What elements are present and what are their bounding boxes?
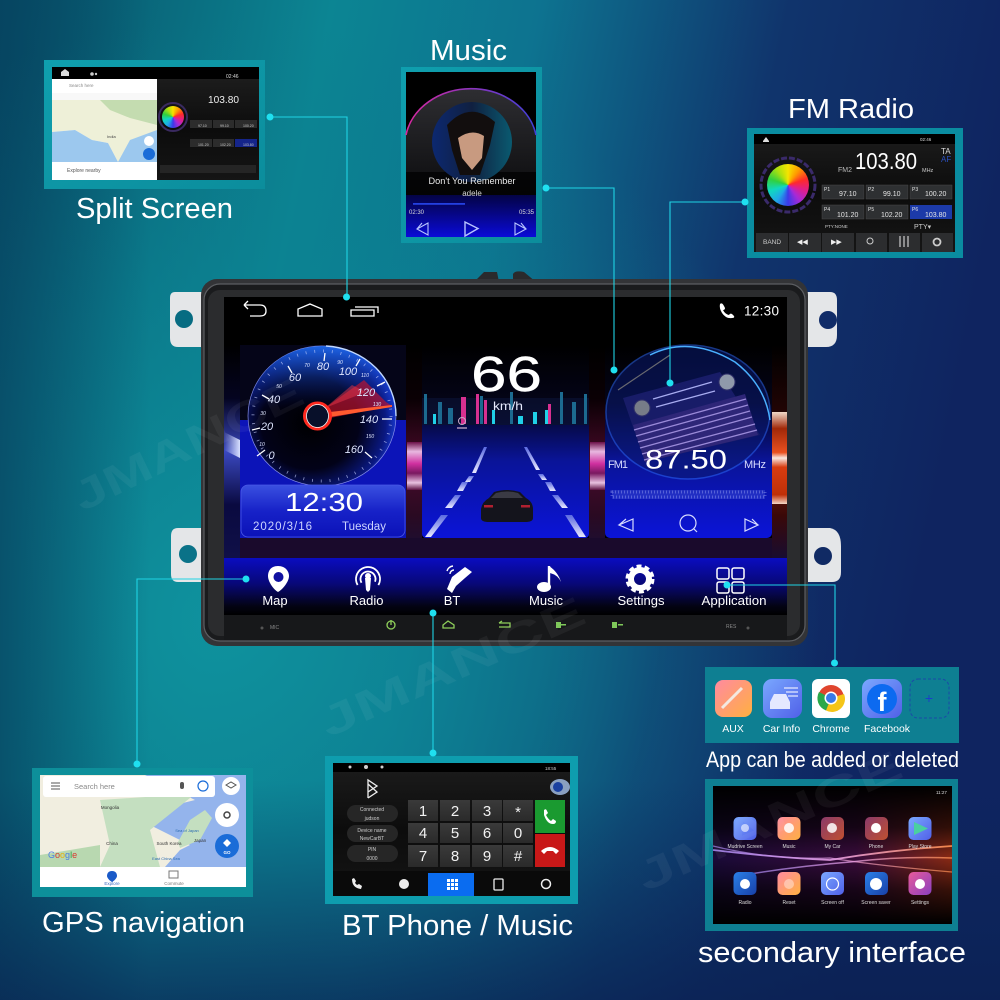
skyline <box>422 392 589 425</box>
panel: apps: + <box>925 690 933 706</box>
major ticks <box>252 353 392 458</box>
panel: GPS navigation: Mongolia <box>101 805 120 810</box>
app labels: Settings <box>911 900 930 906</box>
panel: split screen: 02:46 <box>226 74 239 80</box>
dial numbers: 140 <box>360 414 379 426</box>
connector: application <box>724 582 838 666</box>
hub <box>304 403 330 429</box>
car <box>481 490 533 522</box>
panel: BT phone: 5 <box>451 825 459 842</box>
radio grille <box>633 394 758 462</box>
app labels: Reset <box>782 900 796 906</box>
needle <box>330 405 392 417</box>
watermark: JMANCE <box>313 587 592 746</box>
heading: FM radio: FM Radio <box>788 93 914 124</box>
panel: split screen: Search here <box>69 83 94 88</box>
radio pane <box>157 79 259 180</box>
panel: FM radio: P3 <box>912 187 918 193</box>
radio card <box>605 345 772 538</box>
app labels: Chrome <box>812 723 850 735</box>
app labels <box>727 844 932 906</box>
panel: BT phone: 4 <box>419 825 427 842</box>
panel: GPS navigation: Google <box>48 850 77 860</box>
panel: FM radio: BAND <box>763 239 781 246</box>
speed card: 66 <box>471 348 542 402</box>
panel: music <box>401 67 542 243</box>
app labels <box>722 723 911 735</box>
panel: BT phone: 3 <box>483 803 491 820</box>
panel: FM radio: MHz <box>922 168 934 174</box>
panel: FM radio: P5 <box>868 207 874 213</box>
panel: split screen: 102.20 <box>220 143 231 147</box>
icon: facebook <box>862 679 902 718</box>
icon: settings gear <box>631 570 649 588</box>
heading: music: Music <box>430 35 507 67</box>
head unit <box>170 271 841 646</box>
nav labels: Music <box>529 593 563 608</box>
speed card <box>422 345 589 538</box>
panel: FM radio: 99.10 <box>883 191 901 198</box>
panel: music: adele <box>462 189 482 198</box>
panel: BT phone: 9 <box>483 848 491 865</box>
clock panel <box>241 485 405 537</box>
icon: bluetooth <box>368 780 377 798</box>
panel: music: 02:30 <box>409 210 425 216</box>
panel: apps: f <box>878 687 888 717</box>
icon: applications grid <box>717 568 744 593</box>
icon: car info <box>763 679 802 718</box>
panel: split screen: 99.10 <box>220 124 229 128</box>
panel: FM radio: P2 <box>868 187 874 193</box>
panel: BT phone: * <box>515 804 521 821</box>
dial numbers: 10 <box>259 442 265 448</box>
app labels: Car Info <box>763 723 800 735</box>
app labels: Facebook <box>864 723 911 735</box>
album art <box>432 102 512 182</box>
panel: BT phone: 7 <box>419 848 427 865</box>
connector: BT <box>430 610 436 756</box>
dial numbers: 120 <box>357 387 376 399</box>
panel: split screen: 103.80 <box>208 94 239 106</box>
speedometer card <box>240 345 406 538</box>
heading: split screen: Split Screen <box>76 193 233 225</box>
dial numbers: 110 <box>361 373 369 379</box>
panel: FM radio: TA <box>941 147 951 156</box>
panel: FM radio: 102.20 <box>881 212 903 219</box>
panel: FM radio: 103.80 <box>855 148 917 174</box>
panel: GPS navigation: Search here <box>74 782 115 791</box>
dial numbers: 30 <box>260 411 266 417</box>
system icons top bar <box>244 301 378 316</box>
nav labels: BT <box>444 593 460 608</box>
panel: FM radio: 100.20 <box>925 191 947 198</box>
app labels: AUX <box>722 723 744 735</box>
panel: FM radio: PTY:NONE <box>825 224 848 229</box>
panel: secondary interface: 11:27 <box>936 790 947 795</box>
panel: BT phone: 8 <box>451 848 459 865</box>
panel: split screen: 101.20 <box>198 143 209 147</box>
app labels: Screen off <box>821 900 844 906</box>
dial numbers: 0 <box>268 450 275 462</box>
panel: music: 05:35 <box>519 210 535 216</box>
watermark: JMANCE <box>630 741 909 900</box>
panel: BT phone: PIN <box>368 847 377 853</box>
device pills <box>347 805 398 862</box>
panel: BT phone: 18:55 <box>545 766 557 771</box>
panel: GPS navigation: China <box>106 841 118 846</box>
robot assistant <box>550 779 570 795</box>
panel: split screen: 100.20 <box>243 124 254 128</box>
panel: split screen <box>44 60 265 189</box>
icon: music note <box>548 566 550 586</box>
control strip: MIC <box>270 625 280 631</box>
panel: FM radio: 02:46 <box>920 137 932 142</box>
icon: colour wheel split screen <box>162 106 184 128</box>
dial numbers: 70 <box>304 363 310 369</box>
navigation bar <box>224 558 787 615</box>
panel: GPS navigation: South Korea <box>156 841 182 846</box>
panel: BT phone: 0 <box>514 825 522 842</box>
heading: BT phone: BT Phone / Music <box>342 910 573 942</box>
light streaks <box>224 345 240 558</box>
app labels: My Car <box>824 844 841 850</box>
speedometer card: Tuesday <box>342 521 386 533</box>
signal band <box>612 490 765 499</box>
panel: BT phone: judson <box>364 816 380 822</box>
connector: split screen <box>266 114 350 300</box>
icon: phone status <box>720 303 734 318</box>
control strip <box>224 615 787 640</box>
icon: chrome <box>812 679 850 718</box>
app labels: Phone <box>869 844 883 850</box>
keypad <box>408 800 533 867</box>
panel: FM radio: 103.80 <box>925 212 947 219</box>
app grid <box>734 817 756 840</box>
panel: GPS navigation <box>32 768 253 897</box>
dial numbers: 20 <box>260 421 274 433</box>
caption: apps: App can be added or deleted <box>706 747 959 772</box>
mounting brackets <box>170 292 841 582</box>
panel: GPS navigation: Commute <box>164 881 184 886</box>
connector: FM radio <box>666 198 748 386</box>
top clips <box>474 271 536 282</box>
app labels: Mudrive Screen <box>727 844 763 850</box>
dial numbers: 150 <box>366 434 374 440</box>
panel: split screen: 97.10 <box>198 124 207 128</box>
status clock: 12:30 <box>744 304 779 318</box>
icon: AUX <box>715 680 752 717</box>
panel: FM radio: 101.20 <box>837 212 859 219</box>
panel: FM radio: ▶▶ <box>831 239 842 246</box>
icon: colour wheel FM radio <box>767 164 809 206</box>
dial numbers: 80 <box>317 361 330 373</box>
icon: map pin <box>268 566 289 592</box>
panel: BT phone: 0000 <box>366 856 378 862</box>
panel: FM radio: PTY▾ <box>914 224 932 231</box>
nav labels: Settings <box>618 593 665 608</box>
dial numbers: 50 <box>276 384 282 390</box>
bottom tabs <box>333 871 570 896</box>
connector: music <box>542 184 618 374</box>
panel: BT phone: 6 <box>483 825 491 842</box>
panel: FM radio: P4 <box>824 207 830 213</box>
panel: split screen: Explore nearby <box>67 168 101 174</box>
panel: BT phone: 2 <box>451 803 459 820</box>
dial numbers: 100 <box>339 366 358 378</box>
app labels: Screen saver <box>861 900 891 906</box>
speedometer card: 2020/3/16 <box>253 521 312 533</box>
panel: secondary interface <box>705 779 958 931</box>
connector: GPS <box>134 576 250 768</box>
panel: BT phone: 1 <box>419 803 427 820</box>
panel: GPS navigation: Explore <box>104 881 120 886</box>
nav labels <box>262 593 766 608</box>
panel: GPS navigation: GO <box>223 850 231 855</box>
panel: FM radio: AF <box>941 155 951 164</box>
panel: GPS navigation: Sea of Japan <box>175 828 199 833</box>
dial numbers: 40 <box>268 394 281 406</box>
heading: secondary interface: secondary interface <box>698 937 966 969</box>
dial numbers: 130 <box>373 402 381 408</box>
heading: GPS navigation: GPS navigation <box>42 907 245 939</box>
panel: music: Don't You Remember <box>428 176 516 187</box>
speedometer card: 12:30 <box>285 487 363 517</box>
dial numbers: 60 <box>289 372 302 384</box>
dial numbers: 160 <box>345 444 364 456</box>
icon: radio <box>352 563 384 595</box>
watermark <box>65 368 909 900</box>
panel: BT phone: NewCarBT <box>360 836 384 842</box>
app labels: Play Store <box>908 844 932 850</box>
panel: FM radio: FM2 <box>838 167 852 174</box>
app labels: Music <box>782 844 796 850</box>
panel: GPS navigation: East China Sea <box>152 856 181 861</box>
panel: BT phone: Connected <box>360 807 384 813</box>
radio card: 87.50 <box>645 444 727 474</box>
panel: apps <box>705 667 959 743</box>
nav labels: Application <box>702 593 766 608</box>
panel: FM radio: P6 <box>912 207 918 213</box>
panel: FM radio: 97.10 <box>839 191 857 198</box>
screen <box>224 297 787 615</box>
add slot <box>910 679 949 718</box>
panel: GPS navigation: Japan <box>194 838 207 843</box>
radio card: MHz <box>744 459 766 471</box>
map pane <box>52 79 157 180</box>
icon: BT handset <box>447 567 472 593</box>
speed card: km/h <box>493 399 523 413</box>
panel: BT phone <box>325 756 578 904</box>
bezel <box>201 279 808 646</box>
panel: FM radio: ◀◀ <box>797 239 808 246</box>
panel: BT phone: # <box>514 848 523 865</box>
panel: FM radio: P1 <box>824 187 830 193</box>
nav labels: Radio <box>350 593 383 608</box>
watermark: JMANCE <box>65 368 311 520</box>
control strip: RES <box>726 624 737 630</box>
dial numbers: 90 <box>337 360 343 366</box>
nav labels: Map <box>262 593 288 608</box>
app labels: Radio <box>738 900 752 906</box>
map controls <box>222 777 240 795</box>
dial numbers <box>259 360 381 462</box>
red sweep <box>325 380 392 418</box>
panel: split screen: 103.80 <box>243 143 254 147</box>
panel: FM radio <box>747 128 963 258</box>
panel: BT phone: Device name <box>357 828 387 834</box>
radio card: FM1 <box>608 459 628 471</box>
road markings <box>425 447 586 537</box>
panel: split screen: India <box>107 134 116 139</box>
